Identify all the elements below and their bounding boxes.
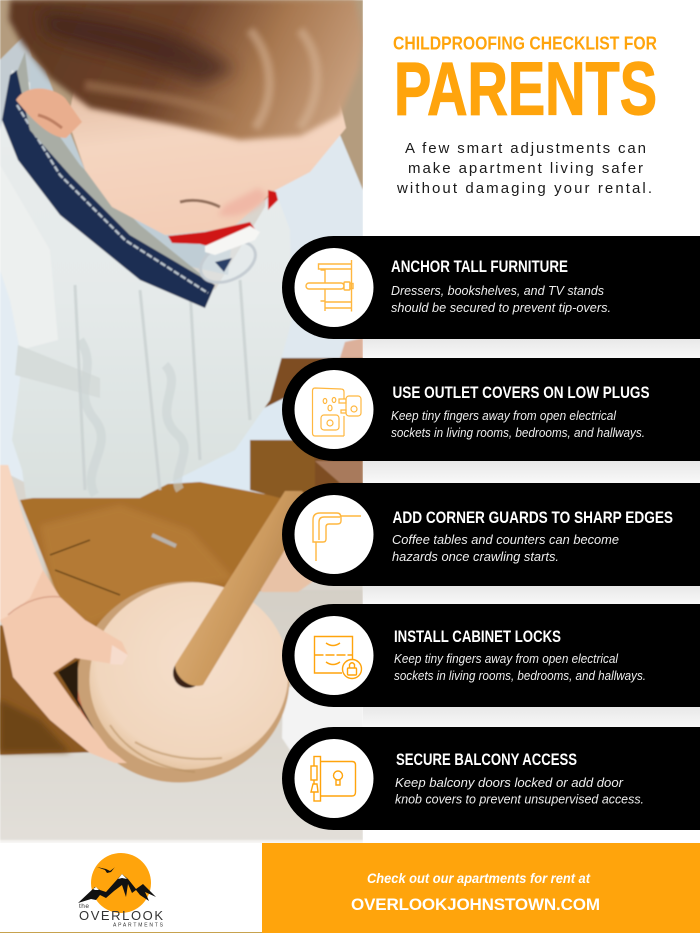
description: Coffee tables and counters can become — [392, 532, 619, 547]
website: OVERLOOKJOHNSTOWN.COM — [351, 895, 600, 914]
description: Dressers, bookshelves, and TV stands — [391, 283, 604, 298]
panel: outlet covers — [282, 358, 700, 461]
intro text: A few smart adjustments can — [405, 140, 646, 157]
wordmark: the — [79, 903, 89, 910]
collar band — [2, 70, 215, 308]
collar rim — [17, 52, 215, 285]
call to action text: Check out our apartments for rent at — [367, 870, 591, 886]
floor — [0, 806, 362, 840]
intro text: make apartment living safer — [408, 160, 643, 177]
icon: corner guard — [313, 513, 361, 561]
dark gap between hand and disc — [58, 660, 94, 730]
heading: SECURE BALCONY ACCESS — [396, 751, 577, 769]
face — [70, 92, 346, 236]
description — [391, 283, 611, 315]
pants — [20, 482, 285, 640]
icon: outlet cover — [312, 388, 361, 436]
wooden peg — [175, 491, 312, 686]
photo: baby with wooden toy — [0, 0, 363, 843]
panel: balcony access — [282, 727, 700, 830]
intro text — [396, 140, 652, 197]
wooden disc — [76, 580, 290, 784]
sweater — [0, 35, 292, 498]
bird — [97, 867, 115, 873]
description — [395, 775, 644, 806]
foot — [260, 550, 313, 592]
skin patch beside shirt — [340, 338, 363, 358]
description: Keep tiny fingers away from open electrical — [391, 408, 617, 423]
description: should be secured to prevent tip-overs. — [391, 300, 611, 315]
description: sockets in living rooms, bedrooms, and hallways. — [394, 668, 646, 683]
gap shadows between bars — [363, 339, 700, 727]
heading — [393, 34, 657, 130]
panel: anchor tall furniture — [282, 236, 700, 339]
icon: furniture strap — [306, 260, 353, 312]
panel: corner guards — [282, 483, 700, 586]
description: knob covers to prevent unsupervised access. — [395, 792, 644, 806]
logo: the Overlook Apartments: APARTMENTS — [113, 922, 164, 928]
intro text: without damaging your rental. — [396, 180, 652, 197]
description — [392, 532, 619, 564]
shirt lower — [168, 396, 293, 496]
description — [391, 408, 645, 440]
ear — [16, 88, 82, 138]
peg hole — [172, 665, 196, 689]
shirt left — [0, 272, 24, 482]
footer: call to action — [262, 843, 700, 933]
white box on the floor — [282, 686, 363, 750]
shirt on the right — [265, 130, 363, 358]
description: Keep tiny fingers away from open electrical — [394, 651, 619, 666]
title line: CHILDPROOFING CHECKLIST FOR — [393, 34, 657, 54]
inner shirt at collar — [30, 55, 232, 275]
description: hazards once crawling starts. — [392, 549, 559, 564]
icon: cabinet lock — [314, 636, 362, 678]
description: Keep balcony doors locked or add door — [395, 775, 624, 790]
heading: INSTALL CABINET LOCKS — [394, 628, 561, 646]
logo: the Overlook Apartments: OVERLOOK — [79, 908, 163, 923]
heading: ANCHOR TALL FURNITURE — [391, 258, 568, 276]
heading: USE OUTLET COVERS ON LOW PLUGS — [392, 384, 650, 402]
footer: logo area — [0, 843, 262, 933]
panel: cabinet locks — [282, 604, 700, 707]
pacifier — [168, 190, 278, 291]
hair — [9, 0, 363, 140]
icon: door lock — [311, 756, 356, 801]
mountains — [78, 874, 156, 903]
description: sockets in living rooms, bedrooms, and hallways. — [391, 425, 645, 440]
logo: the Overlook Apartments — [78, 853, 164, 928]
description — [394, 651, 646, 683]
baby arm and hand — [0, 570, 127, 764]
